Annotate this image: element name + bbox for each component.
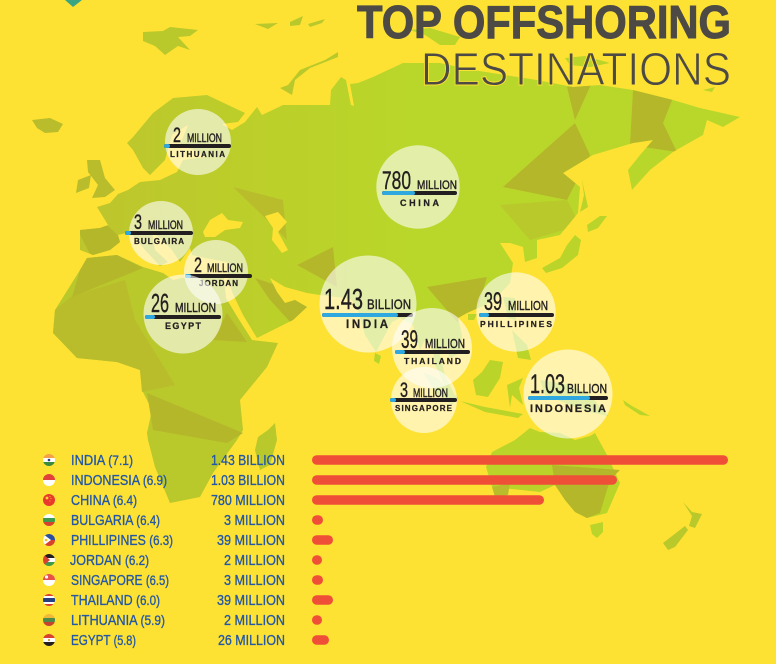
bubble: Thailand: 39 bbox=[401, 326, 418, 354]
label: CHINA (6.4) bbox=[71, 492, 137, 509]
bar bbox=[312, 495, 544, 505]
bubble: Jordan: 2 bbox=[194, 254, 202, 277]
bubble: China: MILLION bbox=[417, 178, 457, 192]
value: 1.43 BILLION bbox=[211, 452, 285, 469]
bar bbox=[312, 475, 617, 485]
flag: Thailand bbox=[43, 594, 55, 606]
row: Egypt bbox=[43, 634, 329, 648]
bubble: Lithuania bbox=[165, 109, 231, 175]
world map bbox=[32, 16, 740, 550]
landmass: Africa bbox=[53, 255, 278, 503]
landmass: Madagascar bbox=[255, 423, 277, 470]
value: 2 MILLION bbox=[224, 552, 285, 569]
row: Thailand bbox=[43, 594, 333, 608]
label: EGYPT (5.8) bbox=[71, 632, 136, 649]
bubble: India: BILLION bbox=[367, 296, 411, 312]
bubble: Phillipines: MILLION bbox=[508, 298, 548, 313]
landmass: Eurasia bbox=[80, 63, 740, 400]
value: 39 MILLION bbox=[217, 532, 285, 549]
bubble: Egypt: EGYPT bbox=[165, 321, 202, 331]
landmass: Australia bbox=[486, 428, 620, 538]
eurasia facets bbox=[75, 80, 677, 325]
bubble: Singapore: MILLION bbox=[413, 388, 448, 400]
bubble: Jordan: JORDAN bbox=[199, 279, 238, 288]
value: 3 MILLION bbox=[224, 512, 285, 529]
bubble: Bulgaria: MILLION bbox=[148, 220, 183, 232]
flag: India bbox=[43, 454, 55, 466]
label: PHILLIPINES (6.3) bbox=[71, 532, 173, 549]
bar bbox=[312, 595, 333, 605]
bubble: Egypt: MILLION bbox=[175, 300, 216, 315]
bubble: Jordan bbox=[184, 240, 250, 304]
value: 26 MILLION bbox=[218, 632, 285, 649]
bubble: Bulgaria: 3 bbox=[134, 211, 142, 234]
bubble: Phillipines: PHILLIPINES bbox=[480, 319, 552, 329]
bar bbox=[312, 455, 728, 465]
bubble: China: 780 bbox=[382, 167, 411, 195]
label: JORDAN (6.2) bbox=[70, 552, 149, 569]
bubble: China bbox=[376, 145, 460, 229]
bubble: Thailand: MILLION bbox=[425, 336, 465, 351]
bubble: Lithuania: 2 bbox=[173, 124, 181, 147]
seas: Black Sea and Caspian bbox=[203, 212, 288, 253]
title bbox=[357, 0, 731, 95]
row: Jordan bbox=[43, 554, 322, 568]
bubble: Thailand: THAILAND bbox=[404, 356, 461, 366]
bubble: Indonesia: BILLION bbox=[567, 381, 607, 396]
bar bbox=[312, 635, 329, 645]
label: INDONESIA (6.9) bbox=[71, 472, 167, 489]
value: 3 MILLION bbox=[224, 572, 285, 589]
row: Indonesia bbox=[43, 474, 617, 488]
icon: teal diamond tab bbox=[65, 0, 82, 7]
bar bbox=[312, 555, 322, 565]
value: 2 MILLION bbox=[224, 612, 285, 629]
label: LITHUANIA (5.9) bbox=[71, 612, 165, 629]
bar bbox=[312, 575, 323, 585]
bubble: Singapore bbox=[391, 367, 457, 433]
bubble: Phillipines bbox=[476, 272, 556, 352]
flag: Phillipines bbox=[43, 534, 55, 546]
flag: Singapore bbox=[43, 574, 55, 586]
bubble: Indonesia bbox=[524, 350, 612, 438]
flag: China bbox=[43, 494, 55, 506]
flag: Bulgaria bbox=[43, 514, 55, 526]
islands: Arctic bbox=[143, 16, 715, 95]
label: SINGAPORE (6.5) bbox=[71, 572, 169, 589]
bar bbox=[312, 615, 322, 625]
flag: Jordan bbox=[43, 554, 55, 566]
label: BULGARIA (6.4) bbox=[71, 512, 160, 529]
bubble: Bulgaria bbox=[127, 201, 193, 265]
bubble: Phillipines: 39 bbox=[484, 288, 502, 316]
row: Phillipines bbox=[43, 534, 333, 548]
bubble: Singapore: SINGAPORE bbox=[395, 404, 453, 413]
label: THAILAND (6.0) bbox=[71, 592, 160, 609]
bubble: China: CHINA bbox=[400, 198, 440, 208]
bubble: India bbox=[320, 256, 416, 352]
flag: Egypt bbox=[43, 634, 55, 646]
islands: East Asia bbox=[374, 180, 607, 364]
row: India bbox=[43, 454, 728, 468]
row: Bulgaria bbox=[43, 514, 323, 528]
row: Lithuania bbox=[43, 614, 322, 628]
bubble: Jordan: MILLION bbox=[207, 263, 243, 275]
bubble: Lithuania: MILLION bbox=[187, 133, 222, 145]
row: China bbox=[43, 494, 544, 508]
bubble: India: 1.43 bbox=[324, 284, 363, 316]
flag: Indonesia bbox=[43, 474, 55, 486]
bubble: Egypt: 26 bbox=[151, 288, 169, 318]
bubble: Egypt bbox=[144, 274, 222, 354]
title line 2: DESTINATIONS bbox=[421, 43, 731, 95]
bar bbox=[312, 515, 323, 525]
bar bbox=[312, 535, 333, 545]
flag: Lithuania bbox=[43, 614, 55, 626]
africa facets bbox=[53, 255, 247, 443]
bubble: Indonesia: INDONESIA bbox=[530, 403, 606, 415]
row: Singapore bbox=[43, 574, 323, 588]
bubble: Bulgaria: BULGAIRA bbox=[134, 237, 184, 246]
bubble: Indonesia: 1.03 bbox=[530, 369, 565, 399]
value: 1.03 BILLION bbox=[211, 472, 285, 489]
landmass: New Zealand bbox=[663, 502, 702, 550]
value: 780 MILLION bbox=[211, 492, 285, 509]
bubble: India: INDIA bbox=[346, 319, 388, 331]
ranking list bbox=[43, 452, 728, 649]
value: 39 MILLION bbox=[217, 592, 285, 609]
bubble: Singapore: 3 bbox=[400, 379, 408, 402]
islands: Southeast Asia bbox=[423, 297, 650, 418]
islands: Iceland, UK, Ireland bbox=[32, 118, 115, 198]
label: INDIA (7.1) bbox=[71, 452, 133, 469]
bubble: Lithuania: LITHUANIA bbox=[170, 150, 225, 159]
bubble: Thailand bbox=[392, 308, 472, 388]
